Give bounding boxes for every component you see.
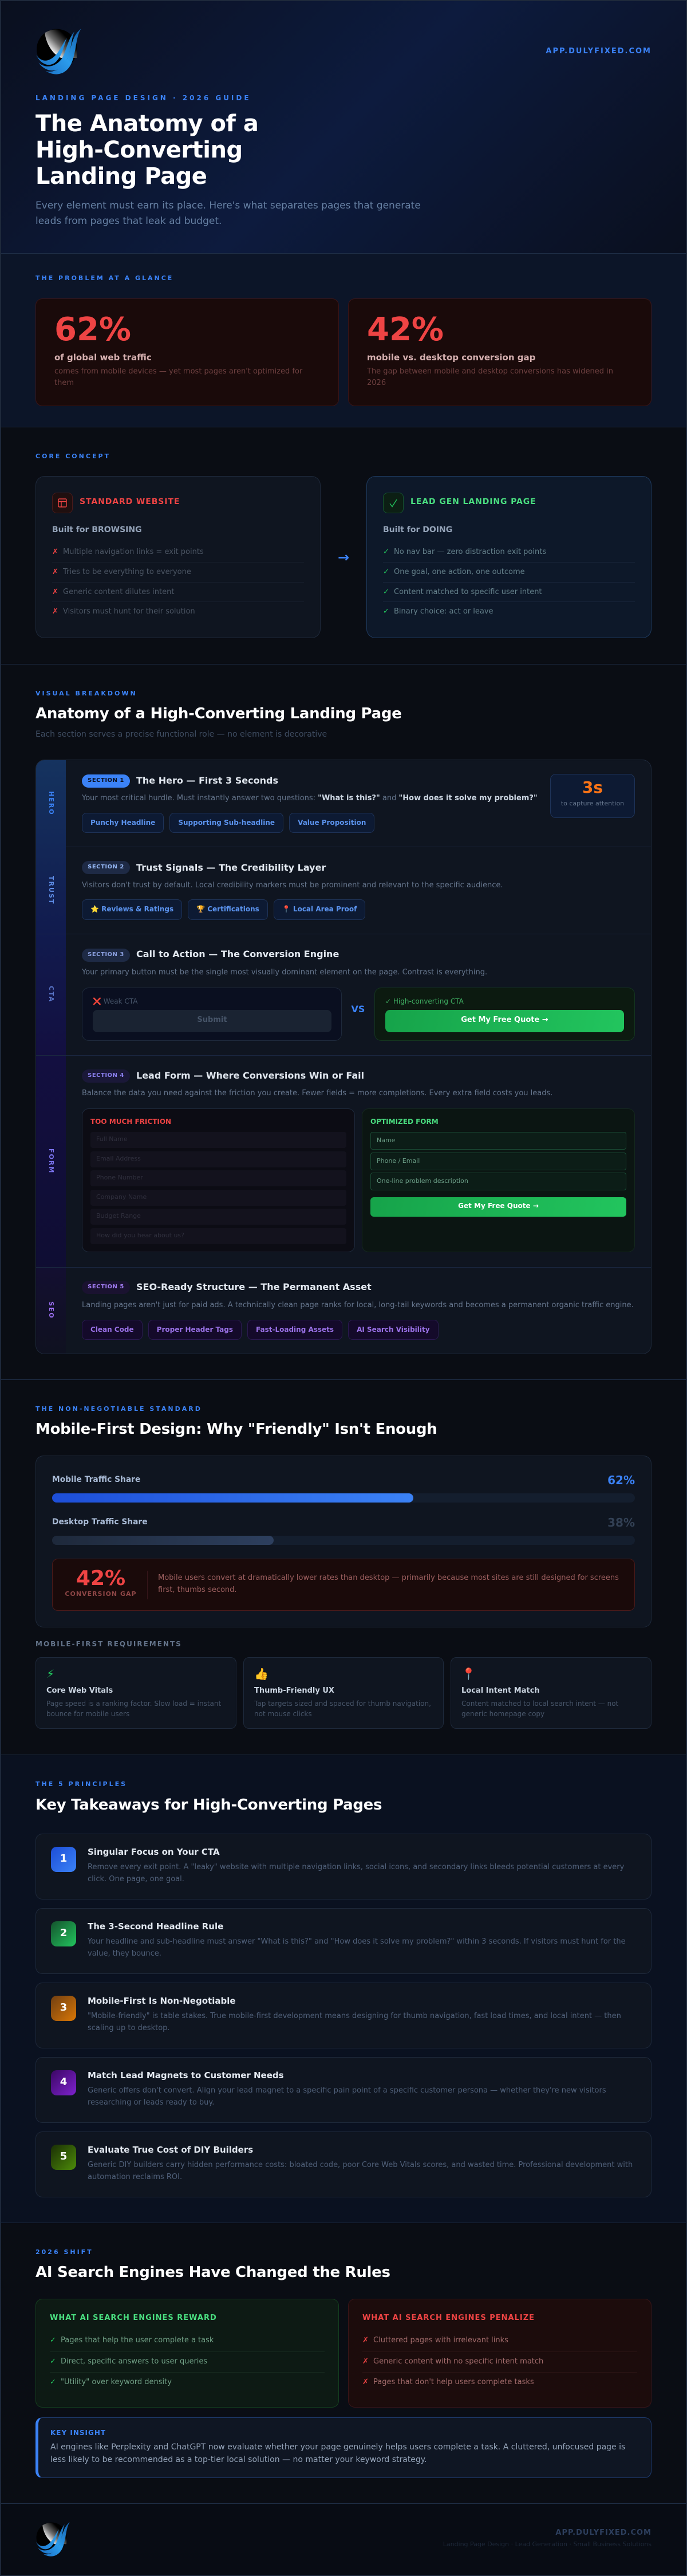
traffic chart xyxy=(35,1456,652,1627)
field: Company Name xyxy=(96,1193,147,1201)
form title: TOO MUCH FRICTION xyxy=(90,1118,171,1126)
number: 3 xyxy=(60,2001,67,2013)
section 2 tags xyxy=(82,899,365,920)
list: website problems: ✗ xyxy=(52,588,58,596)
stat caption: to capture attention xyxy=(561,800,624,807)
section 1 title: The Hero — First 3 Seconds xyxy=(136,774,278,786)
footer xyxy=(0,2504,687,2576)
card subtitle: Built for BROWSING xyxy=(52,525,142,534)
field xyxy=(370,1132,626,1150)
field xyxy=(90,1209,346,1225)
heading: AI Search Engines Have Changed the Rules xyxy=(35,2264,390,2281)
requirement card: thumb-friendly xyxy=(243,1657,444,1729)
submit button: Get My Free Quote → xyxy=(458,1202,539,1210)
number xyxy=(51,1921,76,1946)
panel: mobile-first design xyxy=(0,1380,687,1755)
card: lead gen landing page xyxy=(366,476,652,638)
divider label: trust: TRUST xyxy=(48,876,55,904)
callout: conversion gap xyxy=(52,1559,635,1611)
mobile label: Mobile Traffic Share xyxy=(52,1475,140,1484)
subtitle xyxy=(35,200,421,227)
stat description: them xyxy=(54,379,74,387)
field xyxy=(90,1190,346,1206)
number: 4 xyxy=(60,2076,67,2088)
section 5 tags: Proper Header Tags xyxy=(157,1326,233,1334)
section 1 tags: Value Proposition xyxy=(298,819,366,827)
icon: pin: 📍 xyxy=(461,1667,476,1681)
text: Your headline and sub-headline must answer "What is this?" and "How does it solve my problem?" within 3 seconds. If visitors must hunt for the xyxy=(88,1937,626,1946)
title: The 3-Second Headline Rule xyxy=(88,1921,223,1932)
gap number: 42% xyxy=(76,1567,125,1590)
divider label: seo: SEO xyxy=(48,1301,55,1319)
list: penalties: Pages that don't help users complete tasks xyxy=(373,2378,534,2386)
strong cta example xyxy=(374,988,635,1041)
list: landing page strengths: ✓ xyxy=(383,548,389,556)
section 4 badge: SECTION 4 xyxy=(88,1072,124,1079)
stat card: 42 percent xyxy=(348,298,652,406)
footer tagline: Landing Page Design · Lead Generation · Small Business Solutions xyxy=(443,2540,652,2548)
list: website problems: ✗ xyxy=(52,548,58,556)
subtitle: Every element must earn its place. Here's what separates pages that generate xyxy=(35,200,421,211)
divider label: hero: HERO xyxy=(48,791,55,816)
section 5 tags: AI Search Visibility xyxy=(357,1326,430,1334)
callout text: AI engines like Perplexity and ChatGPT now evaluate whether your page genuinely helps users complete a task. A cluttered, unfocused page is xyxy=(50,2443,625,2452)
section 1 tags: Punchy Headline xyxy=(90,819,155,827)
panel: key takeaways xyxy=(0,1755,687,2223)
list: rewards: ✓ xyxy=(50,2378,56,2386)
weak button xyxy=(93,1010,331,1032)
anatomy diagram xyxy=(35,760,652,1354)
eyebrow: LANDING PAGE DESIGN · 2026 GUIDE xyxy=(35,94,251,102)
eyebrow: VISUAL BREAKDOWN xyxy=(35,690,137,697)
section 2 badge xyxy=(82,861,130,874)
takeaway 2 xyxy=(35,1908,652,1974)
panel: AI search xyxy=(0,2223,687,2504)
strong button: Get My Free Quote → xyxy=(461,1016,548,1024)
card title: LEAD GEN LANDING PAGE xyxy=(410,497,536,506)
section 1 tags xyxy=(82,813,374,833)
list: landing page strengths xyxy=(383,548,635,616)
card text: not mouse clicks xyxy=(254,1710,312,1718)
requirement card: core web vitals xyxy=(35,1657,236,1729)
divider label: cta: CTA xyxy=(48,986,55,1003)
section 5 tags xyxy=(82,1320,439,1340)
list: landing page strengths: No nav bar — zero distraction exit points xyxy=(394,548,546,556)
card: what AI rewards xyxy=(35,2299,339,2408)
field: One-line problem description xyxy=(377,1177,468,1185)
list: website problems: ✗ xyxy=(52,607,58,616)
number xyxy=(51,1847,76,1872)
stat: 3 seconds xyxy=(550,774,635,818)
submit button xyxy=(370,1197,626,1217)
eyebrow: CORE CONCEPT xyxy=(35,453,110,460)
section 1 text: Your most critical hurdle. Must instantly answer two questions: "What is this?" and "How does it solve my problem?" xyxy=(82,794,538,802)
card title: Local Intent Match xyxy=(461,1686,540,1695)
title: High-Converting xyxy=(35,137,243,163)
stat card: 62 percent xyxy=(35,298,339,406)
list: rewards: ✓ xyxy=(50,2336,56,2345)
label: ❌ Weak CTA xyxy=(93,997,137,1005)
subtitle: leads from pages that leak ad budget. xyxy=(35,215,222,227)
list: penalties: Cluttered pages with irrelevant links xyxy=(373,2336,508,2345)
card text: Page speed is a ranking factor. Slow load = instant xyxy=(46,1700,221,1708)
eyebrow: 2026 SHIFT xyxy=(35,2248,93,2256)
section 3 badge xyxy=(82,949,130,962)
title: Singular Focus on Your CTA xyxy=(88,1847,220,1857)
desktop bar xyxy=(52,1536,635,1545)
card title: Core Web Vitals xyxy=(46,1686,113,1695)
list: landing page strengths: ✓ xyxy=(383,607,389,616)
card text xyxy=(46,1700,221,1718)
list: landing page strengths: ✓ xyxy=(383,568,389,576)
list: rewards: "Utility" over keyword density xyxy=(61,2378,172,2386)
section 2 text: Visitors don't trust by default. Local credibility markers must be prominent and relevant to the specific audience. xyxy=(82,881,503,889)
eyebrow: THE 5 PRINCIPLES xyxy=(35,1780,127,1788)
title: The Anatomy of a xyxy=(35,111,258,137)
icon: footer logo xyxy=(36,2522,70,2557)
section 5 badge: SECTION 5 xyxy=(88,1284,124,1290)
panel: visual breakdown xyxy=(0,664,687,1380)
strong button xyxy=(385,1010,624,1032)
label: ✓ High-converting CTA xyxy=(385,997,464,1005)
field: How did you hear about us? xyxy=(96,1232,184,1239)
section 3 badge: SECTION 3 xyxy=(88,951,124,958)
card title: STANDARD WEBSITE xyxy=(80,497,180,506)
stat number: 42% xyxy=(367,311,444,348)
mobile value: 62% xyxy=(607,1473,635,1487)
card text: generic homepage copy xyxy=(461,1710,544,1718)
field xyxy=(90,1228,346,1244)
section 1 tags: Supporting Sub-headline xyxy=(178,819,275,827)
title: Evaluate True Cost of DIY Builders xyxy=(88,2145,253,2155)
icon: brand logo xyxy=(37,29,81,74)
stat label: mobile vs. desktop conversion gap xyxy=(367,352,535,363)
text: Remove every exit point. A "leaky" website with multiple navigation links, social icons, and secondary links bleeds potential customers at every xyxy=(88,1863,624,1871)
section 4 text: Balance the data you need against the friction you create. Fewer fields = more completions. Every extra field costs you leads. xyxy=(82,1088,552,1098)
divider label: form: FORM xyxy=(48,1149,55,1174)
list: website problems: Tries to be everything to everyone xyxy=(63,568,191,576)
field: Full Name xyxy=(96,1135,128,1143)
list: website problems: Multiple navigation links = exit points xyxy=(63,548,204,556)
text: click. One page, one goal. xyxy=(88,1875,184,1883)
field: Budget Range xyxy=(96,1212,141,1220)
callout text xyxy=(50,2443,625,2464)
card title: WHAT AI SEARCH ENGINES PENALIZE xyxy=(362,2314,535,2322)
text xyxy=(88,2012,621,2032)
list: website problems: Generic content dilutes intent xyxy=(63,588,174,596)
eyebrow: THE PROBLEM AT A GLANCE xyxy=(35,274,173,282)
section 1 badge xyxy=(82,774,130,788)
number xyxy=(51,2145,76,2170)
card text: bounce for mobile users xyxy=(46,1710,129,1718)
text xyxy=(88,1937,626,1958)
heading: Anatomy of a High-Converting Landing Page xyxy=(35,705,402,722)
list: website problems: Visitors must hunt for their solution xyxy=(63,607,195,616)
gap label: CONVERSION GAP xyxy=(65,1590,137,1598)
card text xyxy=(461,1700,618,1718)
vs label: VS xyxy=(352,1004,365,1014)
icon: browser window xyxy=(52,493,73,513)
heading: Mobile-First Design: Why "Friendly" Isn't Enough xyxy=(35,1421,437,1438)
text: automation reclaims ROI. xyxy=(88,2173,182,2181)
field xyxy=(90,1170,346,1186)
stat description: 2026 xyxy=(367,379,386,387)
desktop label: Desktop Traffic Share xyxy=(52,1517,148,1527)
section 1 badge: SECTION 1 xyxy=(88,777,124,784)
callout text: less likely to be recommended as a top-tier local solution — no matter your keyword strategy. xyxy=(50,2455,427,2464)
list: penalties: Generic content with no specific intent match xyxy=(373,2357,543,2366)
footer url: APP.DULYFIXED.COM xyxy=(555,2528,652,2537)
section 5 text: Landing pages aren't just for paid ads. A technically clean page ranks for local, long-tail keywords and becomes a permanent organic traffic engine. xyxy=(82,1301,634,1309)
eyebrow: THE NON-NEGOTIABLE STANDARD xyxy=(35,1405,202,1413)
card subtitle: Built for DOING xyxy=(383,525,452,534)
side strip xyxy=(36,760,66,1354)
list: rewards: Direct, specific answers to user queries xyxy=(61,2357,207,2366)
callout title: KEY INSIGHT xyxy=(50,2429,106,2437)
icon: check xyxy=(383,493,404,513)
list: penalties: ✗ xyxy=(362,2378,369,2386)
text: Generic offers don't convert. Align your lead magnet to a specific pain point of a specific customer persona — whether they're new visitors xyxy=(88,2086,606,2095)
text xyxy=(88,1863,624,1883)
list: website problems xyxy=(52,548,304,616)
icon: thumb: 👍 xyxy=(254,1667,269,1681)
list: landing page strengths: Content matched to specific user intent xyxy=(394,588,542,596)
list: website problems: ✗ xyxy=(52,568,58,576)
takeaway 4 xyxy=(35,2057,652,2123)
card text: Content matched to local search intent — not xyxy=(461,1700,618,1708)
text: scaling up to desktop. xyxy=(88,2024,170,2032)
field: Email Address xyxy=(96,1155,141,1162)
subheading: Each section serves a precise functional role — no element is decorative xyxy=(35,730,327,739)
text: researching or leads ready to buy. xyxy=(88,2098,214,2107)
section 4 title: Lead Form — Where Conversions Win or Fail xyxy=(136,1070,364,1080)
gap explanation xyxy=(158,1574,619,1594)
header section xyxy=(0,0,687,254)
section 2 badge: SECTION 2 xyxy=(88,864,124,870)
panel: the problem at a glance xyxy=(0,254,687,427)
panel: core concept xyxy=(0,427,687,664)
stat description xyxy=(54,367,302,387)
stat label: of global web traffic xyxy=(54,352,152,363)
callout: key insight xyxy=(35,2417,652,2478)
section 5 badge xyxy=(82,1281,130,1294)
section 3 text: Your primary button must be the single most visually dominant element on the page. Contrast is everything. xyxy=(82,968,487,977)
field xyxy=(370,1153,626,1170)
list: penalties: ✗ xyxy=(362,2357,369,2366)
form title: OPTIMIZED FORM xyxy=(370,1118,439,1126)
text: "Mobile-friendly" is table stakes. True mobile-first development means designing for thumb navigation, fast load times, and local intent — then xyxy=(88,2012,621,2020)
card: standard website xyxy=(35,476,321,638)
number: 1 xyxy=(60,1853,67,1865)
section 5 tags: Clean Code xyxy=(90,1326,134,1334)
takeaway 1 xyxy=(35,1834,652,1899)
gap explanation: first, thumbs second. xyxy=(158,1586,237,1594)
field: Name xyxy=(377,1136,395,1144)
mobile bar xyxy=(52,1493,635,1503)
field xyxy=(370,1173,626,1190)
icon: lightning: ⚡ xyxy=(46,1667,54,1681)
gap explanation: Mobile users convert at dramatically lower rates than desktop — primarily because most sites are still designed for screens xyxy=(158,1574,619,1582)
requirements heading: MOBILE-FIRST REQUIREMENTS xyxy=(35,1640,182,1648)
stat description xyxy=(367,367,613,387)
title: Match Lead Magnets to Customer Needs xyxy=(88,2070,284,2081)
site url: APP.DULYFIXED.COM xyxy=(546,47,652,56)
desktop value: 38% xyxy=(607,1516,635,1529)
list: rewards: ✓ xyxy=(50,2357,56,2366)
weak button: Submit xyxy=(197,1016,227,1024)
list: rewards xyxy=(50,2336,325,2386)
field: Phone Number xyxy=(96,1174,143,1181)
section 5 title: SEO-Ready Structure — The Permanent Asset xyxy=(136,1281,372,1292)
card title: WHAT AI SEARCH ENGINES REWARD xyxy=(50,2314,217,2322)
list: landing page strengths: Binary choice: act or leave xyxy=(394,607,493,616)
list: penalties xyxy=(362,2336,637,2386)
text: Generic DIY builders carry hidden performance costs: bloated code, poor Core Web Vitals scores, and wasted time. Professional development with xyxy=(88,2161,633,2169)
title: Landing Page xyxy=(35,163,207,190)
friction form example xyxy=(82,1108,355,1252)
section 2 title: Trust Signals — The Credibility Layer xyxy=(136,862,326,873)
list: penalties: ✗ xyxy=(362,2336,369,2345)
list: rewards: Pages that help the user complete a task xyxy=(61,2336,214,2345)
number: 2 xyxy=(60,1927,67,1939)
field xyxy=(90,1151,346,1167)
takeaway 3 xyxy=(35,1983,652,2048)
section 2 tags: ⭐ Reviews & Ratings xyxy=(90,905,173,913)
section 4 badge xyxy=(82,1069,130,1083)
list: landing page strengths: One goal, one action, one outcome xyxy=(394,568,525,576)
list: landing page strengths: ✓ xyxy=(383,588,389,596)
requirement card: local intent xyxy=(451,1657,652,1729)
field: Phone / Email xyxy=(377,1157,420,1165)
card text xyxy=(254,1700,431,1718)
field xyxy=(90,1132,346,1148)
text: value, they bounce. xyxy=(88,1949,161,1958)
stat description: The gap between mobile and desktop conversions has widened in xyxy=(367,367,613,376)
card: what AI penalizes xyxy=(348,2299,652,2408)
text xyxy=(88,2161,633,2181)
weak cta example xyxy=(82,988,342,1041)
arrow: → xyxy=(338,549,349,565)
stat number: 62% xyxy=(54,311,131,348)
section 3 title: Call to Action — The Conversion Engine xyxy=(136,949,339,959)
title: Mobile-First Is Non-Negotiable xyxy=(88,1996,236,2006)
number xyxy=(51,2070,76,2095)
section 5 tags: Fast-Loading Assets xyxy=(256,1326,334,1334)
optimized form example xyxy=(362,1108,635,1252)
stat description: comes from mobile devices — yet most pages aren't optimized for xyxy=(54,367,302,376)
takeaway 5 xyxy=(35,2131,652,2197)
section 2 tags: 📍 Local Area Proof xyxy=(282,905,357,913)
section 2 tags: 🏆 Certifications xyxy=(196,905,259,913)
number: 5 xyxy=(60,2150,67,2162)
number xyxy=(51,1996,76,2021)
text xyxy=(88,2086,606,2107)
stat number: 3s xyxy=(582,778,603,797)
heading: Key Takeaways for High-Converting Pages xyxy=(35,1796,382,1814)
card title: Thumb-Friendly UX xyxy=(254,1686,334,1695)
title xyxy=(35,111,258,190)
card text: Tap targets sized and spaced for thumb navigation, xyxy=(254,1700,431,1708)
